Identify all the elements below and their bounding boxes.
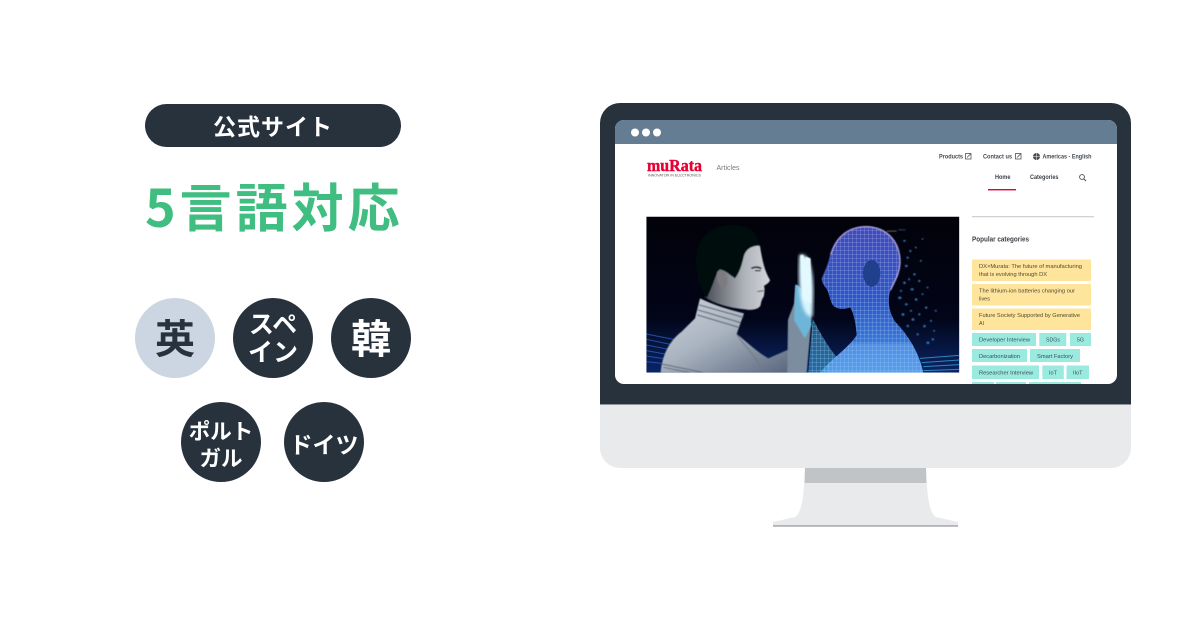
main navigation: Categories [1030, 175, 1059, 181]
teal category tags: Developer Interview [979, 338, 1031, 344]
language circle: Korean [331, 298, 411, 378]
language circle: Portuguese [181, 402, 261, 482]
yellow category tags: DX×Murata: The future of manufacturing [979, 264, 1082, 270]
yellow category tags: The lithium-ion batteries changing our [979, 288, 1075, 294]
language circle: Korean: 韓 [351, 306, 391, 364]
yellow category tags: Future Society Supported by Generative [979, 313, 1081, 319]
main navigation: Home [995, 175, 1011, 181]
teal category tags: Researcher Interview [979, 370, 1034, 376]
title: 5 languages supported: 5言語対応 [145, 167, 404, 242]
yellow category tags: AI [979, 321, 984, 327]
logo: Murata: muRata [647, 156, 702, 175]
monitor stand [773, 468, 958, 527]
teal category tags [972, 333, 1091, 386]
badge: official site: 公式サイト [213, 108, 333, 142]
utility navigation: Contact us [983, 154, 1013, 160]
man [661, 225, 812, 373]
teal category tags: Decarbonization [979, 354, 1020, 360]
yellow category tags: lives [979, 296, 990, 302]
illustration: desktop monitor showing website [600, 103, 1131, 527]
utility navigation [939, 153, 1092, 160]
language circle: German [284, 402, 364, 482]
teal category tags: 5G [1077, 338, 1084, 344]
teal category tags: IoT [1049, 370, 1057, 376]
utility navigation: Products [939, 154, 964, 160]
logo: Murata: INNOVATOR IN ELECTRONICS [648, 174, 702, 178]
sidebar heading: Popular categories [972, 236, 1029, 244]
teal category tags: SDGs [1046, 338, 1060, 344]
website screen [615, 120, 1117, 386]
yellow category tags [972, 260, 1091, 330]
language circle: English (active) [135, 298, 215, 378]
site section label: Articles [716, 165, 740, 172]
language circle: Spanish: イン [248, 332, 298, 368]
browser toolbar [615, 120, 1117, 144]
sidebar divider [972, 216, 1094, 217]
main navigation [988, 175, 1086, 190]
language circle: Portuguese: ポルト [189, 415, 253, 446]
language circle: German: ドイツ [290, 426, 358, 460]
yellow category tags: that is evolving through DX [979, 272, 1047, 278]
language circle: Spanish: スペ [249, 304, 297, 340]
badge: official site [145, 104, 401, 147]
monitor body [600, 103, 1131, 468]
particles [887, 229, 937, 344]
utility navigation: Americas - English [1042, 154, 1092, 160]
language circle: Spanish [233, 298, 313, 378]
hero photo: human and digital figure [646, 217, 959, 373]
language circle: English (active): 英 [155, 306, 195, 364]
teal category tags: Smart Factory [1037, 354, 1073, 360]
hologram figure [794, 223, 930, 373]
raised hand [787, 285, 812, 373]
teal category tags: IIoT [1073, 370, 1083, 376]
language circle: Portuguese: ガル [199, 442, 242, 473]
